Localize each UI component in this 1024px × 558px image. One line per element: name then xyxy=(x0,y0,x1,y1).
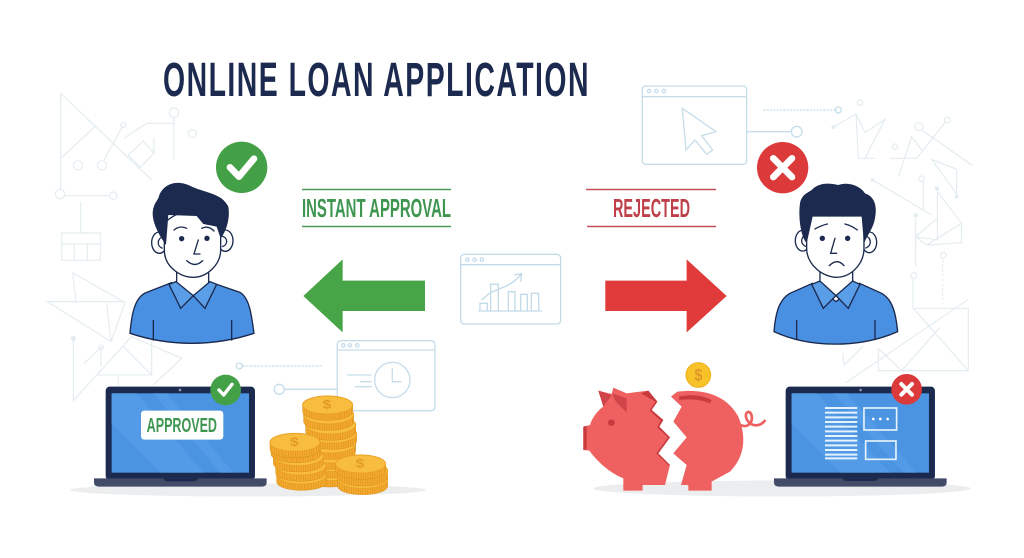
ground shadow left xyxy=(70,484,426,496)
label: rejected xyxy=(586,190,716,226)
label: instant approval: INSTANT APPROVAL xyxy=(302,193,451,223)
left half xyxy=(583,388,670,491)
approved button xyxy=(141,411,223,440)
label: rejected: REJECTED xyxy=(613,193,690,223)
tail xyxy=(741,412,765,426)
coin stacks xyxy=(270,396,388,495)
right background network lines xyxy=(832,100,972,383)
form lines xyxy=(825,408,857,458)
shirt xyxy=(130,283,254,343)
right half xyxy=(671,391,743,491)
laptop: approved xyxy=(94,375,267,487)
window icon: cursor xyxy=(642,86,841,164)
broken piggy bank: $ xyxy=(694,366,703,385)
label: instant approval xyxy=(302,190,451,226)
coin xyxy=(686,363,711,387)
arrow: green left xyxy=(303,259,425,332)
coin stacks: $ xyxy=(356,457,365,471)
broken piggy bank xyxy=(583,363,765,491)
window icon: growth chart xyxy=(461,254,561,324)
icon: green check badge xyxy=(216,142,267,193)
icon: red x badge xyxy=(757,142,808,193)
person: rejected xyxy=(774,184,898,344)
left background network lines xyxy=(47,93,196,401)
hair xyxy=(153,183,229,245)
person: approved xyxy=(130,183,254,343)
facial features xyxy=(174,227,214,264)
coin stacks: $ xyxy=(323,398,332,412)
ears xyxy=(152,232,167,253)
coin stacks: $ xyxy=(290,435,299,449)
arrow: red right xyxy=(605,259,727,332)
title: ONLINE LOAN APPLICATION xyxy=(163,54,590,107)
laptop: rejected xyxy=(774,374,947,487)
face xyxy=(164,211,221,277)
laptop: approved: APPROVED xyxy=(147,414,217,437)
window icon: clock xyxy=(236,341,435,411)
ground shadow right xyxy=(593,480,971,496)
